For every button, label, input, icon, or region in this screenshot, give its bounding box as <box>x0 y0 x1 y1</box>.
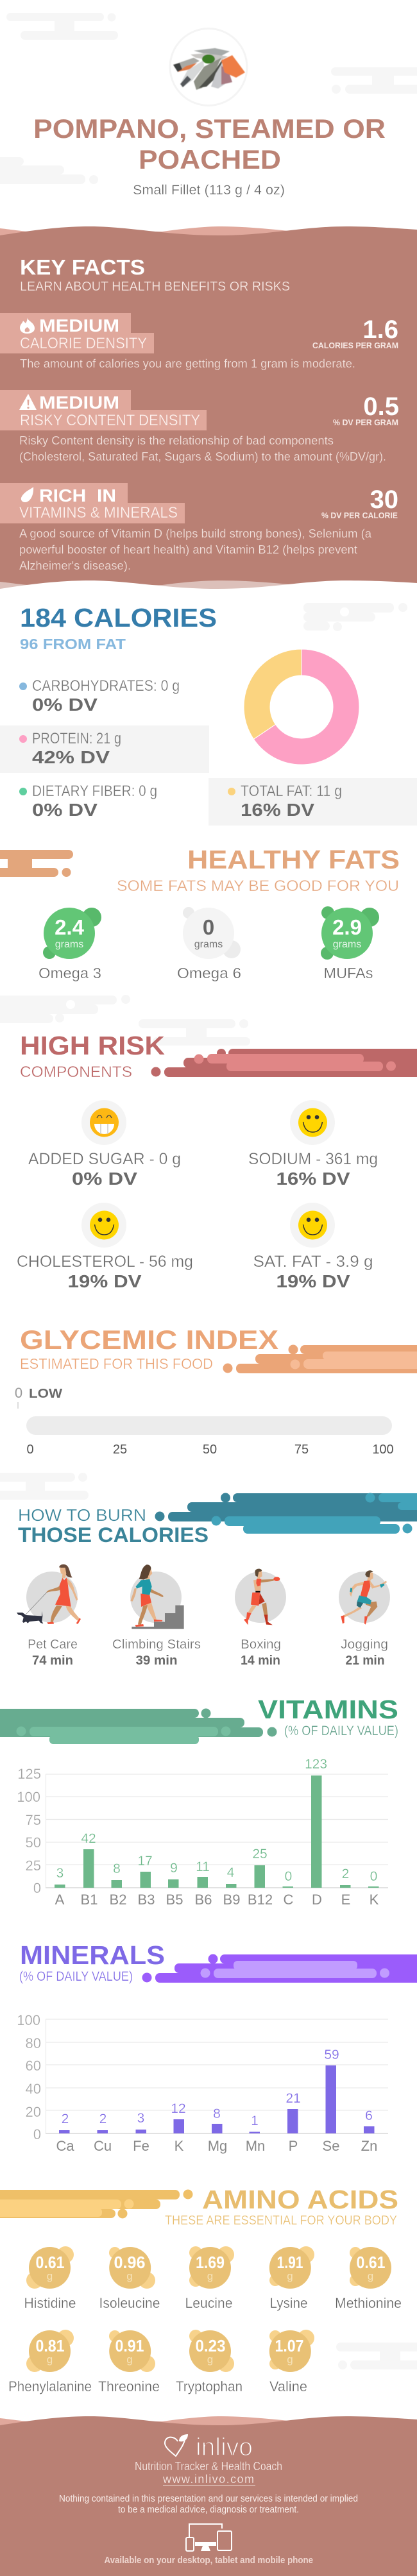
illustration: runner <box>339 1570 390 1625</box>
icon: warning triangle <box>19 394 37 410</box>
amino: isoleucine: g <box>126 2270 133 2282</box>
fat: omega 3: 2.4 <box>55 915 85 939</box>
fact: rich in vitamins and minerals: RICH IN <box>39 486 116 505</box>
bar chart: minerals: 2 <box>99 2112 106 2126</box>
background cloud: high risk right <box>139 1019 250 1046</box>
amino: threonine: g <box>126 2353 133 2366</box>
fact: calorie density <box>0 313 398 370</box>
background cloud: top left <box>6 13 118 40</box>
panel: key facts <box>0 226 417 597</box>
logo: inlivo heart <box>165 2434 188 2456</box>
activity: climbing stairs <box>112 1564 201 1668</box>
bar chart: vitamins: B12 <box>248 1892 273 1908</box>
fact: rich in vitamins and minerals <box>0 483 398 572</box>
amino: valine: g <box>287 2353 293 2366</box>
bar chart: minerals: P <box>289 2138 298 2154</box>
serving size: Small Fillet (113 g / 4 oz) <box>133 183 285 198</box>
bar chart: minerals: 21 <box>285 2091 301 2106</box>
risk: added sugar <box>28 1100 181 1189</box>
bar chart: minerals: 6 <box>365 2108 373 2123</box>
bar chart: vitamins: 4 <box>227 1865 235 1880</box>
decor: glycemic stripes <box>223 1344 417 1373</box>
risk: added sugar: 0% DV <box>72 1169 137 1189</box>
bar chart: vitamins: B2 <box>110 1892 126 1908</box>
activity: boxing: 14 min <box>241 1654 280 1668</box>
glycemic index gauge: 100 <box>372 1443 394 1457</box>
bar chart: minerals: 3 <box>137 2111 144 2126</box>
fact: risky content density: MEDIUM <box>39 393 119 412</box>
icon: grinning face <box>81 1100 126 1145</box>
macro: carbohydrates <box>19 677 180 715</box>
icon: smiling face <box>290 1203 335 1248</box>
icon: leaf <box>21 487 33 502</box>
bar chart: vitamins: B5 <box>166 1892 183 1908</box>
decor: minerals stripes <box>142 1954 417 1983</box>
icon: devices <box>186 2524 232 2551</box>
fact: risky content density: Risky Content density is the relationship of bad components <box>19 434 334 447</box>
healthy fats heading: HEALTHY FATS <box>187 845 400 874</box>
bar chart: vitamins: 0 <box>370 1869 377 1884</box>
decor: healthy fats stripes <box>0 850 73 877</box>
macro: dietary fiber: 0% DV <box>32 800 98 820</box>
decor: vitamins stripes <box>0 1709 277 1744</box>
key facts heading: KEY FACTS <box>20 256 145 280</box>
glycemic index gauge <box>15 1385 394 1457</box>
amino: histidine: Histidine <box>24 2295 76 2311</box>
calories heading: 184 CALORIES <box>20 603 217 632</box>
illustration: boxer <box>235 1569 286 1625</box>
amino: leucine: 1.69 <box>196 2253 225 2272</box>
bar chart: minerals: 1 <box>251 2114 259 2128</box>
amino: phenylalanine: 0.81 <box>36 2336 64 2355</box>
glycemic index heading: GLYCEMIC INDEX <box>20 1325 278 1355</box>
macro: dietary fiber <box>19 783 157 820</box>
activity: jogging <box>339 1570 390 1668</box>
amino: phenylalanine: g <box>47 2353 53 2366</box>
amino: valine: 1.07 <box>275 2336 304 2355</box>
fat: MUFAs: MUFAs <box>323 965 373 981</box>
availability note: Available on your desktop, tablet and mobile phone <box>104 2555 313 2566</box>
bar chart: minerals <box>17 2012 388 2154</box>
amino: valine: Valine <box>269 2378 307 2394</box>
bar chart: minerals: 8 <box>213 2106 221 2121</box>
macro: total fat: 16% DV <box>241 800 314 820</box>
activity: boxing <box>235 1569 286 1668</box>
icon: flame <box>20 318 35 334</box>
fact: calorie density: The amount of calories you are getting from 1 gram is moderate. <box>20 357 355 370</box>
bar chart: vitamins: 2 <box>342 1867 349 1881</box>
vitamins subheading: (% OF DAILY VALUE) <box>284 1724 398 1738</box>
macro: protein: 42% DV <box>32 747 110 767</box>
fat: MUFAs <box>321 906 379 981</box>
amino: leucine <box>185 2246 234 2311</box>
fact: rich in vitamins and minerals: VITAMINS & MINERALS <box>19 504 178 521</box>
glycemic index gauge: 0 <box>26 1443 34 1457</box>
fact: rich in vitamins and minerals: % DV PER CALORIE <box>321 511 398 520</box>
bar chart: minerals: 100 <box>17 2012 40 2028</box>
risk: cholesterol <box>17 1203 193 1291</box>
website link: www.inlivo.com <box>162 2473 254 2486</box>
risk: sodium <box>248 1100 378 1189</box>
macro: protein: PROTEIN: 21 g <box>32 730 121 747</box>
calories from fat: 96 FROM FAT <box>20 636 126 652</box>
title: POACHED <box>139 144 281 174</box>
title: POMPANO, STEAMED OR <box>33 114 386 144</box>
bar chart: vitamins: 11 <box>196 1860 210 1874</box>
risk: cholesterol: CHOLESTEROL - 56 mg <box>17 1253 193 1271</box>
bar chart: vitamins: E <box>341 1892 350 1908</box>
bar chart: vitamins: 125 <box>17 1766 41 1782</box>
disclaimer <box>59 2493 358 2515</box>
amino acids heading: AMINO ACIDS <box>202 2185 398 2214</box>
amino: methionine: 0.61 <box>357 2253 385 2272</box>
amino: valine <box>269 2330 314 2394</box>
amino: tryptophan: Tryptophan <box>176 2378 243 2394</box>
bar chart: minerals: Mn <box>246 2138 265 2154</box>
burn heading line 1: HOW TO BURN <box>18 1505 146 1525</box>
decor: amino acids stripes <box>0 2190 192 2218</box>
glycemic index subheading: ESTIMATED FOR THIS FOOD <box>20 1355 213 1372</box>
bar chart: vitamins: 3 <box>56 1866 64 1881</box>
illustration: woman walking dog <box>17 1564 81 1624</box>
amino: leucine: g <box>207 2270 213 2282</box>
bar chart: vitamins: 75 <box>26 1812 41 1828</box>
fact: rich in vitamins and minerals: powerful booster of heart health) and Vitamin B12 (helps prevent <box>19 543 357 556</box>
glycemic index gauge: 75 <box>294 1443 309 1457</box>
amino: isoleucine: 0.96 <box>114 2253 145 2272</box>
fat: omega 3 <box>38 908 101 981</box>
fact: risky content density: 0.5 <box>363 393 399 421</box>
fact: rich in vitamins and minerals: A good source of Vitamin D (helps build strong bones), Selenium (a <box>19 527 372 540</box>
icon: smiling face <box>81 1203 126 1248</box>
fact: calorie density: CALORIE DENSITY <box>20 335 147 352</box>
bar chart: vitamins: 100 <box>17 1789 40 1805</box>
amino: leucine: Leucine <box>185 2295 232 2311</box>
donut chart: macro share <box>244 649 359 765</box>
risk: added sugar: ADDED SUGAR - 0 g <box>28 1150 181 1168</box>
bar chart: vitamins: 9 <box>170 1861 178 1876</box>
bar chart: vitamins: 123 <box>305 1757 327 1772</box>
fact: rich in vitamins and minerals: Alzheimer's disease). <box>19 559 131 572</box>
macro: carbohydrates: CARBOHYDRATES: 0 g <box>32 677 180 695</box>
bar chart: minerals: Cu <box>94 2138 112 2154</box>
amino: lysine <box>269 2246 314 2311</box>
bar chart: vitamins <box>17 1757 388 1908</box>
activity: boxing: Boxing <box>241 1638 281 1652</box>
bar chart: vitamins: 42 <box>81 1831 96 1846</box>
bar chart: vitamins: A <box>55 1892 65 1908</box>
amino: histidine: 0.61 <box>36 2253 64 2272</box>
fact: calorie density: 1.6 <box>362 316 398 344</box>
macro: carbohydrates: 0% DV <box>32 695 98 715</box>
background cloud: calories <box>303 603 407 631</box>
bar chart: minerals: 2 <box>62 2112 69 2126</box>
amino: tryptophan <box>176 2330 243 2394</box>
amino: isoleucine: Isoleucine <box>99 2295 160 2311</box>
bar chart: minerals: 40 <box>26 2081 41 2097</box>
icon: smiling face <box>290 1100 335 1145</box>
amino: phenylalanine: Phenylalanine <box>8 2378 92 2394</box>
activity: pet care: 74 min <box>32 1654 73 1668</box>
bar chart: vitamins: 0 <box>285 1869 292 1884</box>
amino: methionine: Methionine <box>335 2295 402 2311</box>
risk: saturated fat: SAT. FAT - 3.9 g <box>253 1253 373 1271</box>
amino: tryptophan: 0.23 <box>195 2336 226 2355</box>
bar chart: vitamins: B9 <box>223 1892 240 1908</box>
bar chart: vitamins: K <box>370 1892 379 1908</box>
fact: risky content density: RISKY CONTENT DENSITY <box>20 412 200 429</box>
amino: threonine <box>98 2330 160 2394</box>
panel: footer <box>0 2416 417 2576</box>
risk: sodium: 16% DV <box>276 1169 350 1189</box>
bar chart: minerals: Mg <box>208 2138 227 2154</box>
bar chart: minerals: 12 <box>171 2101 186 2116</box>
minerals subheading: (% OF DAILY VALUE) <box>19 1969 133 1984</box>
fat: MUFAs: grams <box>333 939 361 950</box>
background cloud: mid left <box>0 157 98 184</box>
bar chart: vitamins: 25 <box>252 1847 268 1861</box>
fact: calorie density: MEDIUM <box>39 316 119 335</box>
high risk heading: HIGH RISK <box>20 1031 165 1060</box>
fact: rich in vitamins and minerals: 30 <box>370 486 398 514</box>
macro: protein <box>0 725 209 773</box>
bar chart: vitamins: B1 <box>81 1892 98 1908</box>
bar chart: vitamins: 0 <box>33 1880 41 1896</box>
bar chart: minerals: 0 <box>33 2126 41 2142</box>
bar chart: minerals: Se <box>323 2138 339 2154</box>
minerals heading: MINERALS <box>20 1940 165 1970</box>
risk: saturated fat: 19% DV <box>276 1271 350 1291</box>
bar chart: vitamins: C <box>284 1892 294 1908</box>
fact: calorie density: CALORIES PER GRAM <box>312 341 398 350</box>
fat: omega 3: Omega 3 <box>38 965 101 981</box>
bar chart: minerals: 60 <box>26 2058 41 2074</box>
amino: lysine: g <box>287 2270 293 2282</box>
food image: fish in circle <box>170 28 247 105</box>
fat: omega 6: grams <box>194 939 223 950</box>
disclaimer: to be a medical advice, diagnosis or treatment. <box>118 2504 299 2515</box>
activity: jogging: 21 min <box>345 1654 385 1668</box>
amino acids subheading: THESE ARE ESSENTIAL FOR YOUR BODY <box>165 2214 397 2228</box>
glycemic index gauge: 50 <box>203 1443 217 1457</box>
fact: risky content density: % DV PER GRAM <box>333 418 398 427</box>
bar chart: vitamins: B6 <box>195 1892 212 1908</box>
healthy fats subheading: SOME FATS MAY BE GOOD FOR YOU <box>117 877 399 895</box>
activity: jogging: Jogging <box>341 1638 388 1652</box>
amino: isoleucine <box>99 2247 160 2311</box>
background cloud: high risk left <box>0 995 130 1023</box>
amino: phenylalanine <box>8 2330 92 2394</box>
amino: methionine <box>335 2247 402 2311</box>
illustration: woman on stairs <box>130 1564 184 1629</box>
bar chart: vitamins: 50 <box>26 1835 41 1851</box>
bar chart: minerals: Zn <box>361 2138 377 2154</box>
decor: burn stripes <box>155 1493 417 1534</box>
fat: MUFAs: 2.9 <box>332 915 362 939</box>
bar chart: minerals: 80 <box>26 2035 41 2051</box>
activity: pet care <box>17 1564 81 1668</box>
bar chart: vitamins: D <box>312 1892 322 1908</box>
risk: sodium: SODIUM - 361 mg <box>248 1150 378 1168</box>
tagline: Nutrition Tracker & Health Coach <box>135 2460 282 2473</box>
amino: lysine: 1.91 <box>277 2253 303 2272</box>
bar chart: minerals: 59 <box>324 2047 339 2062</box>
bar chart: vitamins: 17 <box>137 1854 153 1868</box>
key facts subheading: LEARN ABOUT HEALTH BENEFITS OR RISKS <box>20 280 290 294</box>
fact: risky content density <box>0 390 399 463</box>
bar chart: minerals: 20 <box>26 2104 41 2120</box>
background cloud: amino acids <box>336 2343 417 2369</box>
logo wordmark: inlivo <box>196 2434 253 2461</box>
macro: total fat <box>208 778 417 826</box>
activity: climbing stairs: Climbing Stairs <box>112 1638 201 1652</box>
title <box>33 114 386 174</box>
macro: total fat: TOTAL FAT: 11 g <box>241 783 342 800</box>
background cloud: top right <box>331 67 417 94</box>
bar chart: vitamins: B3 <box>138 1892 155 1908</box>
macro: dietary fiber: DIETARY FIBER: 0 g <box>32 783 157 800</box>
background cloud: burn <box>0 1473 89 1500</box>
risk: saturated fat <box>253 1203 373 1291</box>
bar chart: minerals: K <box>174 2138 184 2154</box>
glycemic index gauge: 0 <box>15 1385 22 1401</box>
fat: omega 6 <box>177 907 241 981</box>
amino: threonine: Threonine <box>98 2378 160 2394</box>
fat: omega 6: Omega 6 <box>177 965 241 981</box>
amino: methionine: g <box>368 2270 373 2282</box>
activity: climbing stairs: 39 min <box>136 1654 177 1668</box>
burn heading line 2: THOSE CALORIES <box>18 1523 208 1546</box>
risk: cholesterol: 19% DV <box>68 1271 142 1291</box>
glycemic index gauge: LOW <box>29 1387 62 1401</box>
glycemic index gauge: 25 <box>113 1443 127 1457</box>
activity: pet care: Pet Care <box>28 1638 78 1652</box>
disclaimer: Nothing contained in this presentation and our services is intended or implied <box>59 2493 358 2504</box>
bar chart: vitamins: 25 <box>26 1858 41 1874</box>
high risk subheading: COMPONENTS <box>20 1063 132 1081</box>
bar chart: vitamins: 8 <box>113 1861 121 1876</box>
amino: lysine: Lysine <box>269 2295 308 2311</box>
vitamins heading: VITAMINS <box>258 1695 398 1724</box>
bar chart: minerals: Ca <box>56 2138 74 2154</box>
fat: omega 6: 0 <box>203 915 214 939</box>
amino: threonine: 0.91 <box>115 2336 144 2355</box>
fat: omega 3: grams <box>55 939 83 950</box>
decor: high risk stripes <box>151 1049 417 1077</box>
amino: histidine: g <box>47 2270 53 2282</box>
amino: histidine <box>24 2246 76 2311</box>
fact: risky content density: (Cholesterol, Saturated Fat, Sugars & Sodium) to the amount (%DV/gr). <box>19 450 386 463</box>
bar chart: minerals: Fe <box>133 2138 149 2154</box>
amino: tryptophan: g <box>207 2353 213 2366</box>
